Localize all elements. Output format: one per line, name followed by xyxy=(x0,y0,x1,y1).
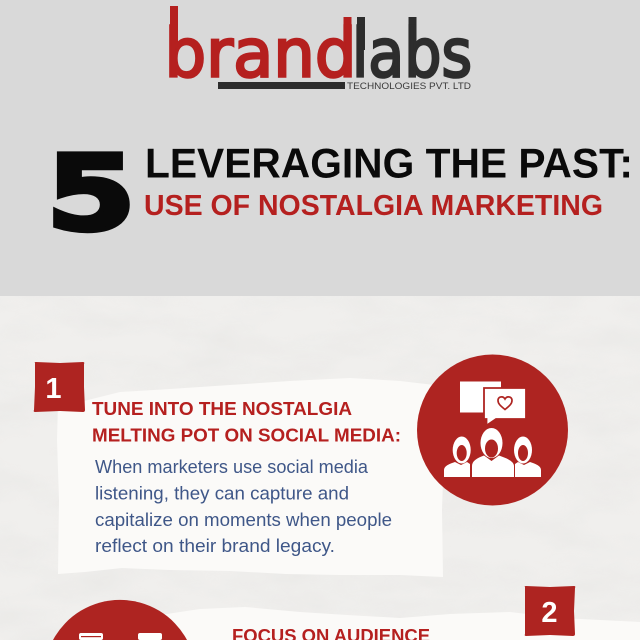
logo tagline: TECHNOLOGIES PVT. LTD xyxy=(347,81,471,92)
big number 5: 5 xyxy=(46,132,136,254)
torn paper panel 1 xyxy=(57,378,444,577)
paper background xyxy=(0,296,640,640)
number badge 2: 2 xyxy=(541,597,558,629)
icon: speech bubbles with heart xyxy=(460,382,526,426)
icon circle 2 xyxy=(53,600,187,640)
number badge 2 xyxy=(525,586,575,636)
heading 1: MELTING POT ON SOCIAL MEDIA: xyxy=(92,424,401,446)
number badge 1 xyxy=(34,362,85,412)
icon: three people xyxy=(444,428,541,477)
body text 1: reflect on their brand legacy. xyxy=(95,536,335,556)
body text 1: When marketers use social media xyxy=(95,457,369,477)
logo wordmark: labs: labs xyxy=(352,14,472,92)
logo underline bar xyxy=(218,82,345,89)
title line 2: USE OF NOSTALGIA MARKETING xyxy=(144,190,603,222)
body text 1: listening, they can capture and xyxy=(95,484,349,504)
icon circle: audience with speech bubbles xyxy=(417,354,568,506)
heading 1 xyxy=(92,398,401,446)
icon: partial device shapes xyxy=(79,633,162,640)
heading 1: TUNE INTO THE NOSTALGIA xyxy=(92,398,352,419)
logo wordmark: brand: brand xyxy=(164,14,356,92)
logo xyxy=(164,6,472,92)
torn paper panel 2 xyxy=(160,607,640,640)
title line 1: LEVERAGING THE PAST: xyxy=(145,140,633,187)
header background xyxy=(0,0,640,296)
body text 1 xyxy=(95,457,392,556)
number badge 1: 1 xyxy=(45,373,62,405)
body text 1: capitalize on moments when people xyxy=(95,510,392,530)
